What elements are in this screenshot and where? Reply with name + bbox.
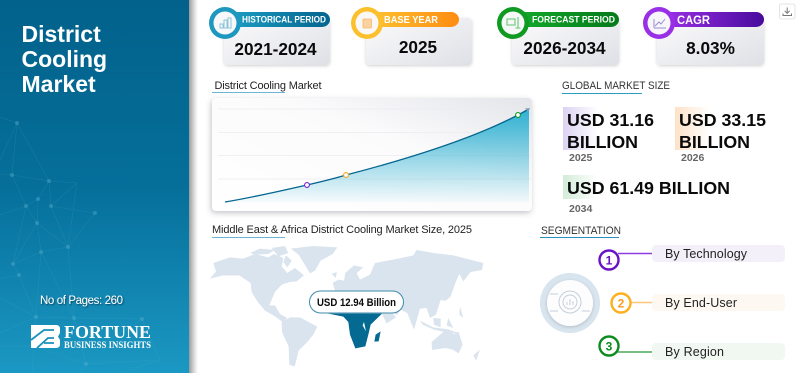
data point: 2026 bbox=[344, 173, 348, 177]
card: CAGR bbox=[643, 7, 764, 65]
card: base year: 2025 bbox=[399, 37, 438, 57]
callout: regional value bbox=[310, 291, 404, 313]
segment 1: 1 bbox=[606, 254, 613, 268]
icon: calendar bbox=[363, 19, 372, 28]
stat: 2034 market size: USD 61.49 BILLION bbox=[567, 178, 730, 198]
network decoration bbox=[0, 117, 160, 373]
heading: district cooling market: District Cooling Market bbox=[214, 80, 322, 92]
stat: 2026 market size: USD 33.15 bbox=[679, 110, 766, 130]
card: historical period: HISTORICAL PERIOD bbox=[242, 14, 326, 26]
highlighted region: Africa bbox=[328, 314, 382, 348]
segment 2 bbox=[612, 294, 785, 312]
segment 2: 2 bbox=[618, 296, 625, 310]
segment 3: 3 bbox=[606, 340, 613, 354]
stat: 2026 market size: 2026 bbox=[681, 152, 705, 164]
card: CAGR: 8.03% bbox=[686, 38, 735, 58]
logo bbox=[31, 322, 151, 350]
heading: regional market size: Middle East & Africa District Cooling Market Size, 2025 bbox=[212, 224, 472, 236]
logo: FORTUNE bbox=[64, 322, 151, 342]
area chart panel bbox=[212, 98, 532, 211]
icon: forecast chart bbox=[507, 17, 520, 28]
segment 1 bbox=[600, 245, 785, 270]
stat: 2034 market size: 2034 bbox=[569, 203, 593, 215]
trend line bbox=[225, 109, 529, 202]
title: Cooling bbox=[22, 46, 107, 72]
segment 3: By Region bbox=[665, 345, 724, 359]
icon: download button bbox=[780, 4, 795, 19]
card: base year: BASE YEAR bbox=[384, 15, 439, 26]
stat: 2034 market size bbox=[563, 175, 730, 215]
sidebar panel bbox=[0, 0, 198, 373]
icon: growth chart bbox=[654, 19, 666, 28]
stat: 2025 market size: BILLION bbox=[567, 132, 638, 152]
logo: BUSINESS INSIGHTS bbox=[64, 340, 151, 350]
segment 3 bbox=[600, 336, 785, 360]
callout: regional value: USD 12.94 Billion bbox=[317, 297, 396, 309]
card: historical period bbox=[209, 7, 330, 65]
card: forecast period: FORECAST PERIOD bbox=[532, 14, 615, 26]
world map bbox=[210, 246, 483, 367]
card: CAGR: CAGR bbox=[677, 13, 710, 27]
card: forecast period: 2026-2034 bbox=[523, 38, 606, 58]
page count: No of Pages: 260 bbox=[40, 295, 123, 307]
icon: bar chart bbox=[220, 18, 231, 28]
area under curve bbox=[225, 109, 529, 202]
segmentation hub icon bbox=[540, 273, 600, 333]
card: forecast period bbox=[497, 7, 619, 65]
stat: 2025 market size bbox=[563, 107, 654, 164]
stat: 2026 market size bbox=[675, 107, 766, 164]
heading: global market size: GLOBAL MARKET SIZE bbox=[562, 80, 670, 92]
segment 2: By End-User bbox=[665, 296, 737, 310]
data point: 2034 bbox=[516, 113, 520, 117]
stat: 2026 market size: BILLION bbox=[679, 132, 750, 152]
card: base year bbox=[351, 7, 472, 65]
heading: segmentation: SEGMENTATION bbox=[541, 225, 621, 237]
title: Market bbox=[22, 71, 96, 97]
card: historical period: 2021-2024 bbox=[234, 39, 317, 59]
data point: 2025 bbox=[305, 183, 309, 187]
segment 1: By Technology bbox=[665, 247, 748, 261]
stat: 2025 market size: USD 31.16 bbox=[567, 110, 654, 130]
title: District bbox=[22, 21, 101, 47]
stat: 2025 market size: 2025 bbox=[569, 152, 593, 164]
